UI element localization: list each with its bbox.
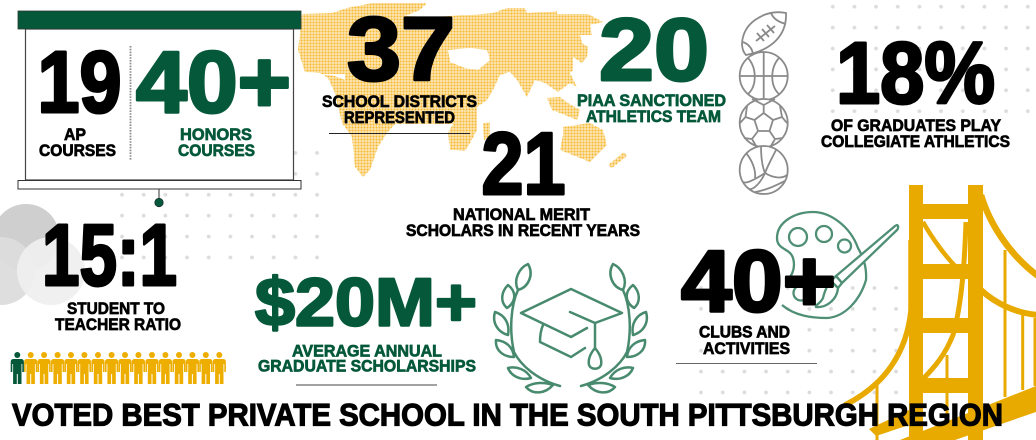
screen bottom bar — [18, 180, 301, 189]
stat: 18% graduates collegiate athletics: OF GRADUATES PLAY — [831, 117, 1001, 135]
stat: 19 AP courses: COURSES — [39, 142, 116, 160]
stat: 37 school districts: 37 — [347, 0, 455, 100]
stat: 20 PIAA athletics teams — [577, 0, 726, 126]
stat: 40+ clubs and activities — [676, 233, 836, 364]
stat: 37 school districts — [322, 0, 477, 134]
stat: 15:1 student to teacher ratio — [42, 207, 181, 334]
stat: $20M+ scholarships: GRADUATE SCHOLARSHIPS — [258, 358, 476, 376]
stat: 40+ clubs and activities: ACTIVITIES — [703, 340, 790, 358]
icon: football — [742, 12, 786, 55]
laurel right — [581, 264, 647, 392]
panel: projector screen with course counts — [18, 11, 301, 207]
icon row: one teacher and fifteen students — [11, 352, 226, 384]
stat: 18% graduates collegiate athletics: COLLEGIATE ATHLETICS — [821, 133, 1010, 151]
stat: 40+ honors courses: COURSES — [178, 142, 255, 160]
dotted world map — [298, 3, 627, 177]
stat: 15:1 student to teacher ratio: STUDENT TO — [67, 300, 165, 318]
icon: paint palette and brush — [777, 212, 898, 318]
stat: 21 national merit scholars — [406, 114, 640, 240]
stat: 15:1 student to teacher ratio: 15:1 — [42, 207, 177, 304]
grey overlapping circles — [0, 204, 85, 305]
bridge towers — [909, 185, 983, 440]
stat: 20 PIAA athletics teams: PIAA SANCTIONED — [577, 92, 726, 110]
laurel left — [494, 264, 560, 392]
screen top bar — [18, 11, 301, 29]
screen body — [26, 29, 294, 180]
icon: volleyball — [740, 146, 788, 194]
stat: 37 school districts: REPRESENTED — [344, 109, 455, 127]
stat: 40+ honors courses: 40+ — [136, 34, 291, 131]
stat: 20 PIAA athletics teams: 20 — [599, 0, 709, 99]
bridge cables — [845, 195, 1036, 440]
icons: stacked sports balls — [740, 12, 788, 194]
background dot grid: bottom right — [690, 278, 907, 403]
stat: $20M+ scholarships — [255, 264, 477, 385]
bridge inner cables — [920, 222, 966, 425]
stat: 19 AP courses: AP — [64, 126, 86, 144]
icon: golden bridge — [845, 185, 1036, 440]
background dot grid: top right — [822, 0, 1036, 122]
icon: soccer ball — [740, 99, 788, 147]
stat: 37 school districts: SCHOOL DISTRICTS — [322, 93, 477, 111]
stat: 19 AP courses: 19 — [38, 34, 122, 131]
stat: 20 PIAA athletics teams: ATHLETICS TEAM — [586, 108, 721, 126]
bridge deck — [869, 386, 1036, 440]
background dot grid: centre — [111, 142, 328, 268]
stat: $20M+ scholarships: AVERAGE ANNUAL — [292, 342, 442, 360]
stat: 15:1 student to teacher ratio: TEACHER RATIO — [55, 316, 181, 334]
stat: $20M+ scholarships: $20M+ — [255, 264, 477, 340]
stat: 40+ honors courses: HONORS — [180, 126, 252, 144]
mortarboard — [521, 289, 622, 369]
pull cord — [155, 189, 163, 207]
icon: basketball — [740, 52, 788, 100]
dotted divider — [130, 46, 132, 160]
stat: 21 national merit scholars: 21 — [482, 114, 566, 213]
stat: 19 AP courses — [38, 34, 122, 160]
stat: 21 national merit scholars: SCHOLARS IN RECENT YEARS — [406, 222, 640, 240]
stat: 21 national merit scholars: NATIONAL MERIT — [453, 206, 590, 224]
icon: graduation cap in laurel wreath — [494, 264, 647, 392]
stat: 40+ clubs and activities: CLUBS AND — [699, 324, 790, 342]
stat: 18% graduates collegiate athletics: 18% — [836, 25, 995, 122]
stat: 40+ clubs and activities: 40+ — [681, 233, 836, 330]
